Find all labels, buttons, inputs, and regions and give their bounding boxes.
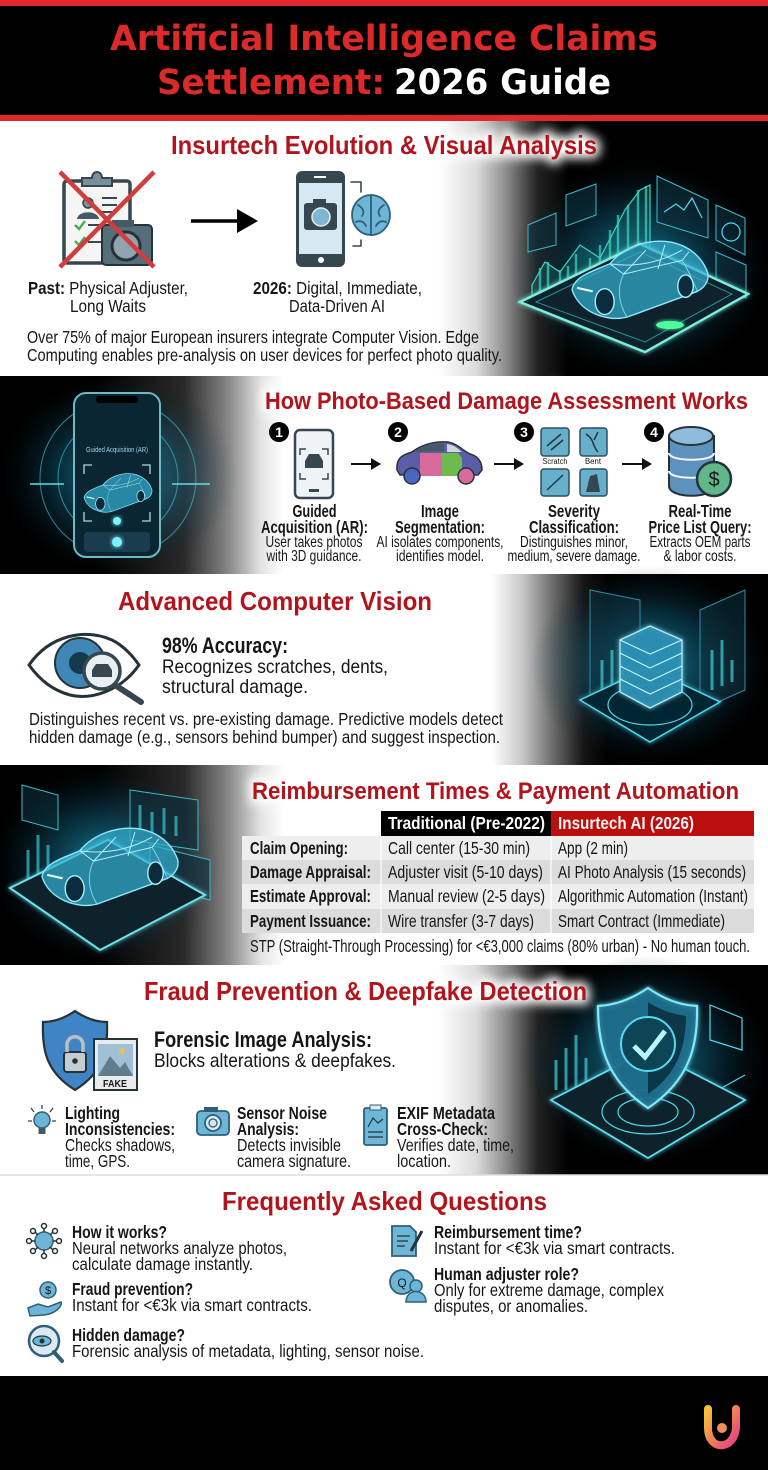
- text: past: [28, 278, 188, 316]
- panel: insurtech evolution: [0, 121, 768, 380]
- text: 2026: 2026: Digital, Immediate,: [253, 278, 422, 298]
- faq: fraud prevention: Instant for <€3k via smart contracts.: [72, 1295, 312, 1315]
- faq: human adjuster role: disputes, or anomalies.: [434, 1296, 588, 1316]
- text: summary: Distinguishes recent vs. pre-existing damage. Predictive models detect: [29, 709, 503, 729]
- row: payment issuance: Payment Issuance:: [250, 911, 371, 931]
- text: 2026: [253, 278, 422, 316]
- text: [376, 501, 504, 565]
- heading: Advanced Computer Vision: [118, 586, 432, 616]
- faq: how it works: Neural networks analyze photos,: [72, 1238, 287, 1258]
- heading: Insurtech Evolution & Visual Analysis: [171, 130, 597, 160]
- icon: hand with coin: $: [45, 1285, 51, 1297]
- faq: hidden damage: Hidden damage?: [72, 1325, 185, 1345]
- badge 1: [269, 422, 289, 442]
- badge 4: [644, 422, 664, 442]
- item: lighting inconsistencies: Checks shadows,: [65, 1135, 175, 1155]
- arrow: [494, 458, 524, 470]
- footer band: [0, 1376, 768, 1470]
- icon: neural network: [26, 1224, 62, 1258]
- panel: advanced computer vision: [0, 565, 768, 765]
- table header: Insurtech AI (2026): [558, 813, 694, 833]
- text: Guided: [292, 501, 336, 521]
- icon: damage tiles: Scratch: [542, 457, 568, 466]
- icon: clipboard document: [364, 1105, 387, 1145]
- faq: hidden damage: [29, 1325, 424, 1361]
- heading: Insurtech Evolution & Visual Analysis: [171, 130, 597, 160]
- icon: eye with magnifier: [29, 634, 141, 702]
- icon: database with dollar: $: [708, 469, 720, 491]
- badge 1: 1: [275, 424, 283, 440]
- arrow: [191, 209, 258, 233]
- icon: light bulb: [28, 1105, 56, 1134]
- row: damage appraisal: [242, 860, 754, 884]
- item: lighting inconsistencies: [28, 1103, 175, 1171]
- badge 2: 2: [394, 424, 402, 440]
- badge 4: 4: [650, 424, 658, 440]
- faq: human adjuster role: Only for extreme damage, complex: [434, 1280, 664, 1300]
- row: payment issuance: Wire transfer (3-7 days): [388, 911, 534, 931]
- arrow: [351, 458, 381, 470]
- text: [508, 501, 640, 565]
- icon: document with pen: [392, 1226, 422, 1256]
- row: claim opening: Call center (15-30 min): [388, 838, 530, 858]
- icon: hand with coin: [28, 1282, 61, 1316]
- faq: how it works: How it works?: [72, 1222, 167, 1242]
- faq: human adjuster role: Human adjuster role?: [434, 1264, 579, 1284]
- text: 2026: Data-Driven AI: [289, 296, 385, 316]
- text: summary: Computing enables pre-analysis on user devices for perfect photo quality.: [27, 345, 502, 365]
- icon: phone with brain: [296, 171, 390, 267]
- text: forensic analysis: Forensic Image Analysis:: [154, 1027, 372, 1052]
- row: payment issuance: Smart Contract (Immediate): [558, 911, 725, 931]
- text: past: Past: Physical Adjuster,: [28, 278, 188, 298]
- illustration: AR phone: Guided Acquisition (AR): [86, 447, 148, 454]
- title: Settlement:: [157, 63, 385, 103]
- item: lighting inconsistencies: Lighting: [65, 1103, 120, 1123]
- icon: shield with lock and fake photo: [43, 1011, 137, 1090]
- row: estimate approval: Manual review (2-5 days): [388, 886, 545, 906]
- item: sensor noise: Detects invisible: [237, 1135, 341, 1155]
- heading: Fraud Prevention & Deepfake Detection: [144, 976, 587, 1006]
- text: [648, 501, 752, 565]
- item: sensor noise: camera signature.: [237, 1151, 351, 1171]
- icon: crossed-out clipboard and camera: [60, 172, 154, 267]
- icon: database with dollar: [669, 427, 731, 496]
- title: [110, 19, 658, 103]
- icon: camera: [197, 1107, 229, 1135]
- icon: phone with car: [295, 430, 333, 498]
- row: claim opening: App (2 min): [558, 838, 628, 858]
- text: with 3D guidance.: [266, 548, 362, 565]
- text: summary: [27, 327, 502, 365]
- faq: reimbursement time: [392, 1222, 675, 1258]
- illustration: AR phone: [0, 375, 236, 575]
- item: lighting inconsistencies: Inconsistencies:: [65, 1119, 175, 1139]
- illustration: neon data stack: [530, 565, 768, 765]
- text: accuracy: structural damage.: [162, 676, 308, 698]
- text: summary: Over 75% of major European insurers integrate Computer Vision. Edge: [27, 327, 479, 347]
- item: sensor noise: Sensor Noise: [237, 1103, 327, 1123]
- illustration: neon shield: [520, 955, 768, 1165]
- text: summary: [29, 709, 503, 747]
- text: past: Long Waits: [70, 296, 146, 316]
- item: sensor noise: Analysis:: [237, 1119, 299, 1139]
- text: AI isolates components,: [376, 534, 504, 551]
- icon: person with speech bubble: Q: [397, 1276, 407, 1290]
- text: Severity: [548, 501, 600, 521]
- row: payment issuance: [242, 909, 754, 933]
- icon: magnifier with eye: [29, 1326, 62, 1361]
- panel: fraud prevention: [0, 955, 768, 1175]
- panel: FAQ: [0, 1175, 768, 1376]
- text: [261, 501, 368, 565]
- icon: shield with lock and fake photo: FAKE: [103, 1079, 127, 1090]
- title: Artificial Intelligence Claims: [110, 19, 658, 59]
- text: Real-Time: [668, 501, 732, 521]
- row: claim opening: [242, 836, 754, 860]
- text: Distinguishes minor,: [520, 534, 628, 551]
- item: EXIF metadata: location.: [397, 1151, 451, 1171]
- faq: human adjuster role: [390, 1264, 664, 1316]
- text: Segmentation:: [395, 517, 485, 537]
- step 4: price list query: [644, 422, 752, 565]
- badge 3: [514, 422, 534, 442]
- row: damage appraisal: Adjuster visit (5-10 days): [388, 862, 543, 882]
- item: EXIF metadata: EXIF Metadata: [397, 1103, 495, 1123]
- text: medium, severe damage.: [508, 548, 640, 565]
- title: 2026 Guide: [394, 63, 611, 103]
- faq: fraud prevention: Fraud prevention?: [72, 1279, 193, 1299]
- item: EXIF metadata: [364, 1103, 514, 1171]
- faq: reimbursement time: Instant for <€3k via smart contracts.: [434, 1238, 675, 1258]
- faq: fraud prevention: [28, 1279, 312, 1316]
- text: User takes photos: [266, 534, 363, 551]
- faq: hidden damage: Forensic analysis of metadata, lighting, sensor noise.: [72, 1341, 424, 1361]
- table header: [381, 811, 754, 836]
- badge 2: [388, 422, 408, 442]
- text: accuracy: 98% Accuracy:: [162, 633, 288, 658]
- badge 3: 3: [520, 424, 528, 440]
- item: EXIF metadata: Cross-Check:: [397, 1119, 488, 1139]
- icon: segmented car: [397, 442, 482, 484]
- text: summary: hidden damage (e.g., sensors behind bumper) and suggest inspection.: [29, 727, 500, 747]
- icon: person with speech bubble: [390, 1270, 426, 1302]
- faq: how it works: [26, 1222, 287, 1274]
- illustration: neon car: [0, 765, 220, 965]
- arrow: [622, 458, 652, 470]
- text: accuracy: Recognizes scratches, dents,: [162, 656, 388, 678]
- icon: brand logo: [708, 1409, 736, 1445]
- illustration: neon car dashboard: [510, 160, 768, 380]
- text: forensic analysis: [154, 1027, 396, 1072]
- panel: reimbursement times: [0, 765, 768, 965]
- comparison table: [242, 811, 754, 933]
- table header: Traditional (Pre-2022): [388, 813, 545, 833]
- faq: how it works: calculate damage instantly.: [72, 1254, 253, 1274]
- text: & labor costs.: [664, 548, 736, 565]
- heading: Frequently Asked Questions: [222, 1186, 547, 1216]
- icon: damage tiles: Bent: [585, 457, 602, 466]
- step 2: image segmentation: [376, 422, 504, 565]
- icon: damage tiles: [541, 428, 607, 496]
- text: Image: [421, 501, 459, 521]
- title banner: [0, 0, 768, 121]
- text: identifies model.: [396, 548, 484, 565]
- step 3: severity classification: [508, 422, 640, 565]
- item: lighting inconsistencies: time, GPS.: [65, 1151, 130, 1171]
- row: claim opening: Claim Opening:: [250, 838, 348, 858]
- heading: Fraud Prevention & Deepfake Detection: [144, 976, 587, 1006]
- item: EXIF metadata: Verifies date, time,: [397, 1135, 514, 1155]
- step 1: guided acquisition: [261, 422, 368, 565]
- heading: Advanced Computer Vision: [118, 586, 432, 616]
- faq: reimbursement time: Reimbursement time?: [434, 1222, 582, 1242]
- panel: damage assessment: [0, 375, 768, 575]
- item: sensor noise: [197, 1103, 351, 1171]
- text: Acquisition (AR):: [261, 517, 368, 537]
- row: damage appraisal: Damage Appraisal:: [250, 862, 371, 882]
- text: accuracy: [162, 633, 388, 698]
- row: estimate approval: [242, 884, 754, 909]
- row: estimate approval: Estimate Approval:: [250, 886, 371, 906]
- text: Classification:: [529, 517, 619, 537]
- text: forensic analysis: Blocks alterations & deepfakes.: [154, 1050, 396, 1072]
